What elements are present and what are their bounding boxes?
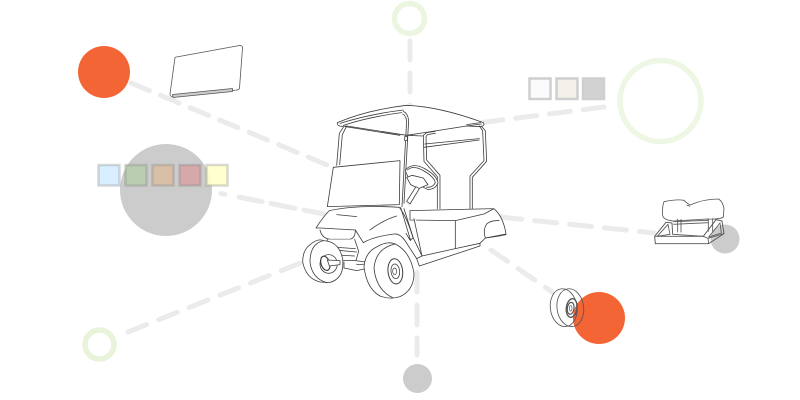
circle: large grey [120,144,212,236]
circle: orange top left [78,46,130,98]
cart: front cowl [316,207,422,259]
cart: windshield frame [337,111,423,207]
cart: windshield lower panel [327,161,400,207]
icon: wheel [548,287,586,328]
cart: cowl details [320,207,413,241]
ring: large green right [620,60,701,142]
connector: cart to orange circle and top panel [131,83,332,167]
cart: left front wheel [303,240,343,283]
circle: small grey by seat [710,224,740,254]
cart: rear body and tub [410,209,506,266]
circle: orange lower right [573,292,625,344]
cart: roof [337,105,484,135]
connector: cart to colour swatches left [221,194,330,215]
icon: roof panel [170,46,242,98]
swatches: right colour options [530,78,604,99]
ring: green bottom left [85,330,114,359]
circle: grey bottom [403,364,432,393]
cart: bumper and front axle [326,239,367,271]
connector: cart to bottom-left ring [128,260,308,332]
connector: cart to top ring [408,41,412,106]
cart: steering wheel [405,166,438,204]
swatches: left colour options [98,165,228,186]
cart: rear roof struts [423,126,487,209]
connector: cart to wheel [491,250,552,292]
connector: cart to bottom circle [414,272,420,355]
connector: cart to colour swatches right [478,107,604,123]
connector: cart to seat [500,217,654,233]
cart: right front wheel [364,243,414,298]
icon: seat [655,199,724,244]
ring: green top [394,4,424,34]
illustration: golf cart [303,105,506,298]
